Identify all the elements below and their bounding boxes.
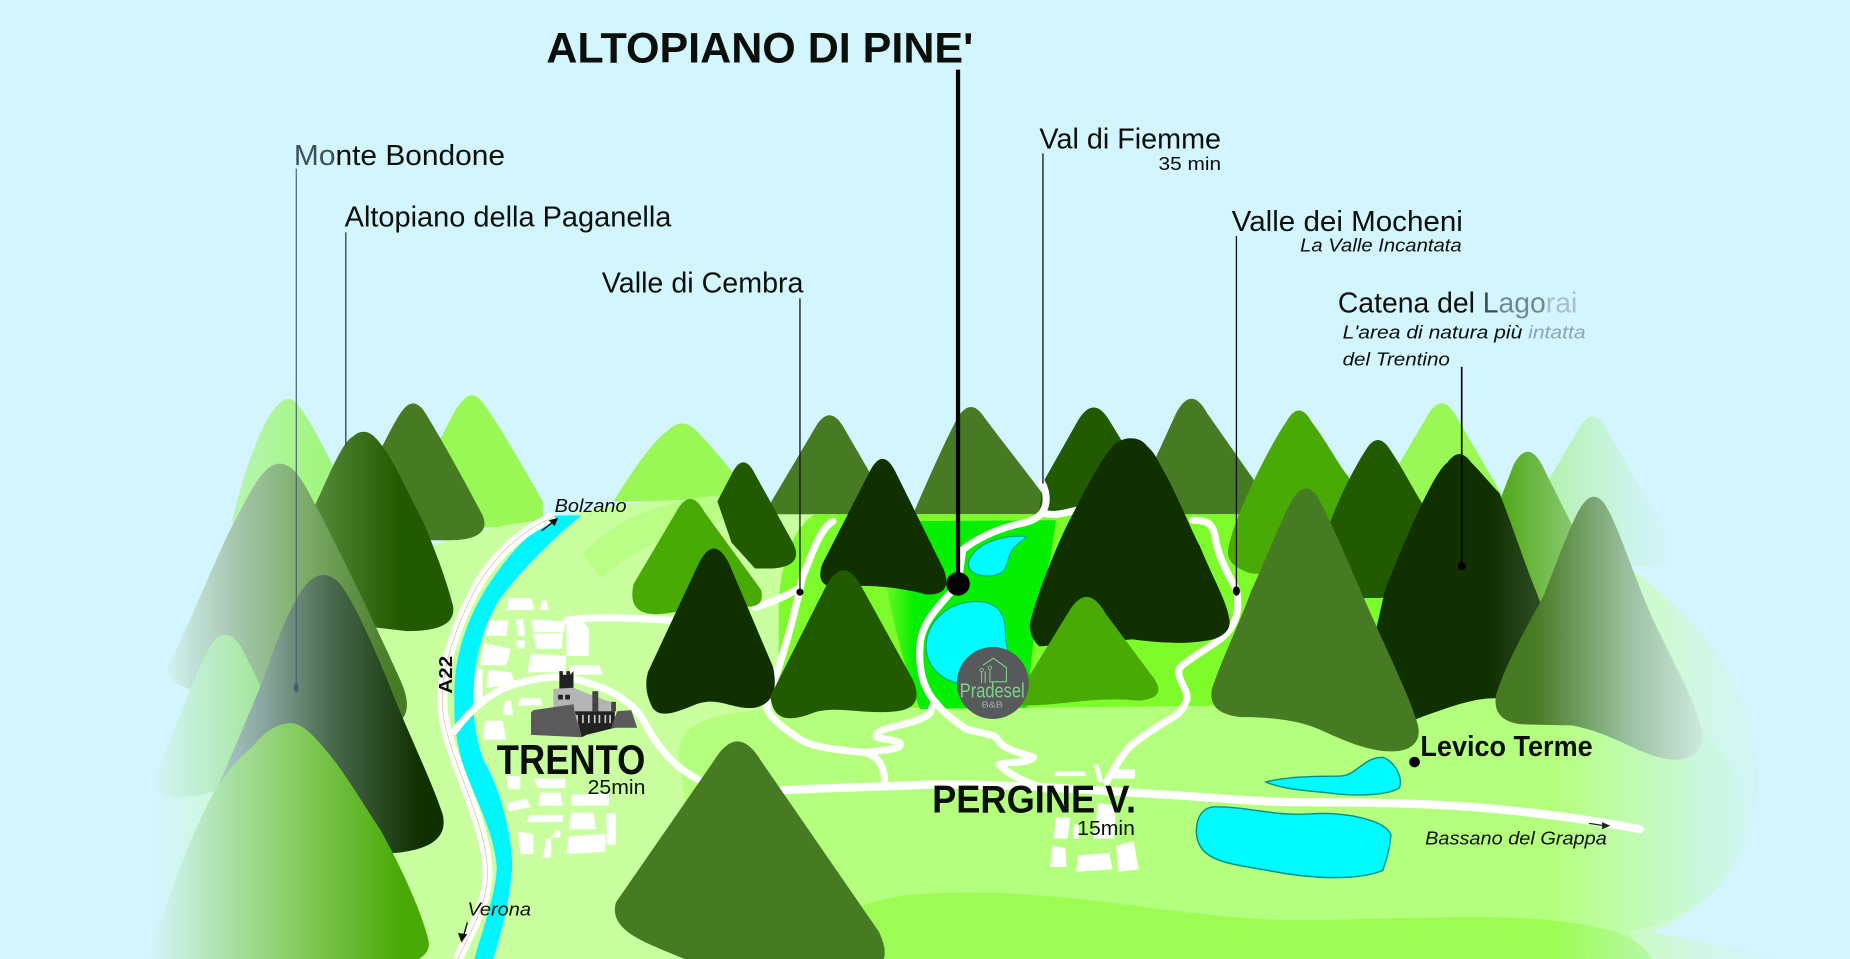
leader line: Valle dei Mocheni <box>1233 236 1240 596</box>
leader line: Monte Bondone <box>294 169 299 692</box>
mid-ground mountains <box>354 403 1675 959</box>
logo: Pradesel B&B: Pradesel <box>960 681 1025 703</box>
label: Valle dei Mocheni <box>1232 205 1463 255</box>
label: Val di Fiemme: Val di Fiemme <box>1039 123 1221 155</box>
leader line: Paganella <box>345 232 347 446</box>
arrow: Bolzano <box>542 518 558 531</box>
label: Pergine V. <box>932 779 1136 840</box>
leader line: Val di Fiemme <box>1042 153 1044 484</box>
label: Catena del Lagorai <box>1338 287 1586 370</box>
label: Verona: Verona <box>467 898 531 919</box>
label: Trento: TRENTO <box>497 737 645 783</box>
label: Levico Terme: Levico Terme <box>1420 730 1593 762</box>
lakes Levico and Caldonazzo <box>1196 757 1400 878</box>
label: Trento <box>497 737 645 799</box>
leader line: Altopiano di Pine' <box>946 70 970 596</box>
label: Trento: 25min <box>588 777 645 799</box>
lakes near Pine' <box>926 536 1026 684</box>
town blocks: Trento <box>473 598 616 858</box>
arrow: Bassano del Grappa <box>1589 822 1610 829</box>
label: Val di Fiemme <box>1039 123 1221 174</box>
motorway A22 <box>442 517 555 959</box>
label: Valle dei Mocheni: La Valle Incantata <box>1300 234 1462 255</box>
label: Catena del Lagorai: L'area di natura più intatta <box>1343 322 1586 343</box>
valley ground <box>142 495 1793 959</box>
label: Bolzano: Bolzano <box>555 495 627 516</box>
label: Val di Fiemme: 35 min <box>1159 153 1221 174</box>
label: Pergine V.: 15min <box>1077 818 1135 840</box>
title: ALTOPIANO DI PINE' <box>546 25 973 72</box>
label: Catena del Lagorai: del Trentino <box>1343 349 1450 370</box>
label: Altopiano della Paganella: Altopiano della Paganella <box>345 200 672 232</box>
left mountains <box>148 432 453 959</box>
arrow: Verona <box>458 922 467 942</box>
right mountains <box>1211 454 1702 760</box>
back mountain range <box>233 395 1516 554</box>
logo: Pradesel B&B <box>957 647 1029 719</box>
town blocks: Pergine <box>1050 764 1139 872</box>
label: Bassano del Grappa: Bassano del Grappa <box>1425 828 1607 849</box>
label: Monte Bondone: Monte Bondone <box>294 139 505 171</box>
label: A22: A22 <box>435 656 456 694</box>
road network <box>454 482 1640 829</box>
logo: Pradesel B&B: B&B <box>982 701 1003 710</box>
castle of Trento <box>531 671 637 737</box>
leader line: Valle di Cembra <box>796 298 804 596</box>
river Adige <box>454 515 582 959</box>
dot: Levico Terme <box>1409 757 1420 767</box>
leader line: Catena del Lagorai <box>1458 367 1466 570</box>
label: Pergine V.: PERGINE V. <box>932 779 1136 822</box>
label: Valle di Cembra: Valle di Cembra <box>602 267 804 299</box>
label: Catena del Lagorai: Catena del Lagorai <box>1338 287 1577 319</box>
label: Valle dei Mocheni: Valle dei Mocheni <box>1232 205 1463 237</box>
